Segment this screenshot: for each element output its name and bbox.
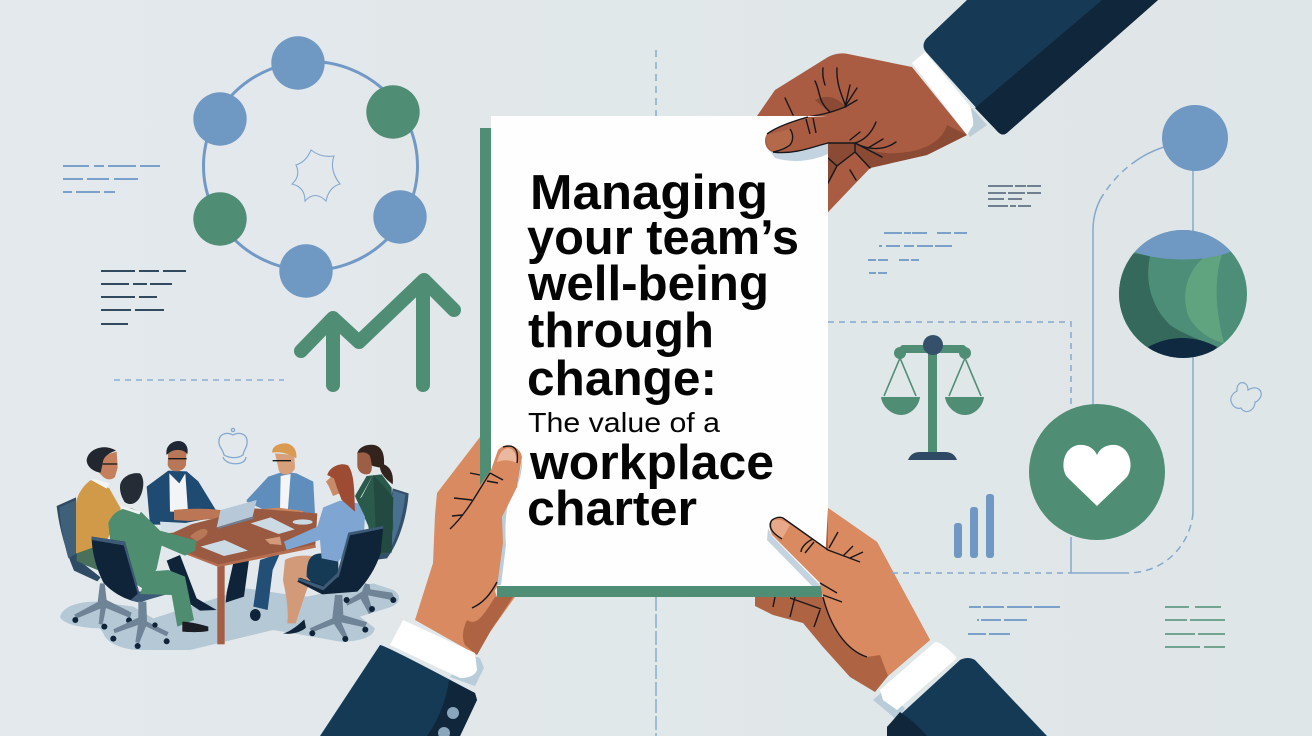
bottom text placeholder lines, blue [968, 607, 1060, 634]
person: man in orange sweater [76, 447, 121, 572]
hand: top right thumb on paper [765, 116, 855, 161]
heading: main title lines: through [528, 303, 714, 358]
panel: team circle network [193, 36, 427, 298]
sleeve shading [975, 0, 1158, 134]
thumbnail [497, 448, 517, 463]
knuckle fold [815, 97, 846, 113]
hand lines [770, 517, 867, 657]
icon: green globe [1119, 230, 1247, 358]
sleeve buttons [438, 707, 459, 736]
thumb [770, 518, 828, 597]
person: woman in blue blouse [265, 464, 365, 634]
heading: main title lines: your team’s [527, 210, 799, 265]
thumb paper shadow [497, 460, 522, 585]
knuckle lines [785, 68, 896, 183]
network ring [204, 62, 418, 270]
laptop and papers on table [160, 500, 313, 556]
thumb lines [767, 117, 855, 153]
hand base [755, 508, 930, 692]
sleeve shading [887, 712, 927, 736]
floor shadow [60, 583, 399, 650]
cuff [390, 620, 477, 678]
chair left back [57, 497, 132, 630]
bottom text placeholder lines, green [1165, 607, 1225, 647]
centre vertical dashed guide lines [655, 50, 657, 736]
sleeve: top right [924, 0, 1158, 134]
icon: heart circle [1029, 404, 1165, 540]
paper green side edge [480, 128, 491, 485]
sleeve shading [427, 680, 477, 736]
icon: blue circle [1162, 105, 1228, 171]
cuff shadow [873, 692, 905, 720]
sleeve [887, 658, 1047, 736]
person: man in blue suit [247, 443, 315, 621]
heading: main title lines: change: [527, 351, 717, 406]
chair front right [297, 526, 383, 642]
person: man in navy suit [147, 441, 249, 611]
thumbnail [766, 129, 793, 151]
thumb shadow [768, 143, 828, 161]
chair front left [92, 537, 170, 649]
lower finger tone [828, 152, 870, 212]
green trousers and shoe over chair seat [140, 570, 208, 632]
hand lines [450, 446, 517, 608]
paper sheet [491, 116, 828, 586]
right connector lines [828, 147, 1193, 573]
hand: top right, back fingers and sleeve [757, 0, 1158, 212]
person: man in green sweater [108, 473, 208, 589]
left text placeholder lines, blue [63, 166, 160, 192]
table with legs [163, 508, 317, 644]
heading: workplace charter [527, 435, 774, 536]
left dashed rule [114, 379, 284, 381]
centre star outline [292, 150, 340, 201]
heading: main title lines: Managing [530, 165, 768, 220]
hand: bottom left, palm behind paper [415, 437, 515, 655]
chair right back [344, 488, 409, 614]
icon: balance scale [881, 335, 984, 460]
cuff [880, 642, 957, 710]
thumbnail [772, 520, 790, 539]
heading: workplace charter: charter [527, 481, 697, 536]
right text placeholder lines, dark [988, 186, 1041, 206]
hand light [820, 508, 930, 676]
icon: small crown doodle [219, 428, 247, 464]
paper bottom green edge [497, 586, 822, 597]
sleeve [320, 645, 477, 736]
hand: bottom left thumb and sleeve [320, 445, 522, 736]
heading: main title lines: well-being [527, 256, 769, 311]
palm shadow [463, 597, 513, 655]
illustration: team meeting around table [57, 441, 409, 650]
icon: mini bar chart [954, 494, 994, 558]
thumb shape [765, 116, 828, 153]
icon: green rising arrows [301, 280, 454, 385]
thumb paper shadow [767, 528, 821, 586]
icon: cloud doodle [1231, 383, 1261, 412]
heading: main title lines [527, 165, 799, 406]
title text block [527, 165, 799, 536]
heading: workplace charter: workplace [529, 435, 774, 490]
thumb [470, 445, 522, 597]
hand shadow [828, 125, 967, 212]
right text placeholder lines, blue upper [868, 233, 967, 273]
cuff shadow [960, 108, 987, 137]
person: woman in green jacket [355, 445, 393, 559]
hand: bottom right [755, 508, 1047, 736]
cuff [912, 52, 973, 135]
left text placeholder lines, dark [101, 271, 186, 324]
cuff shadow [450, 655, 484, 686]
network nodes [193, 36, 427, 298]
heading: subtitle small line: The value of a [528, 407, 720, 438]
back of hand [757, 53, 967, 212]
